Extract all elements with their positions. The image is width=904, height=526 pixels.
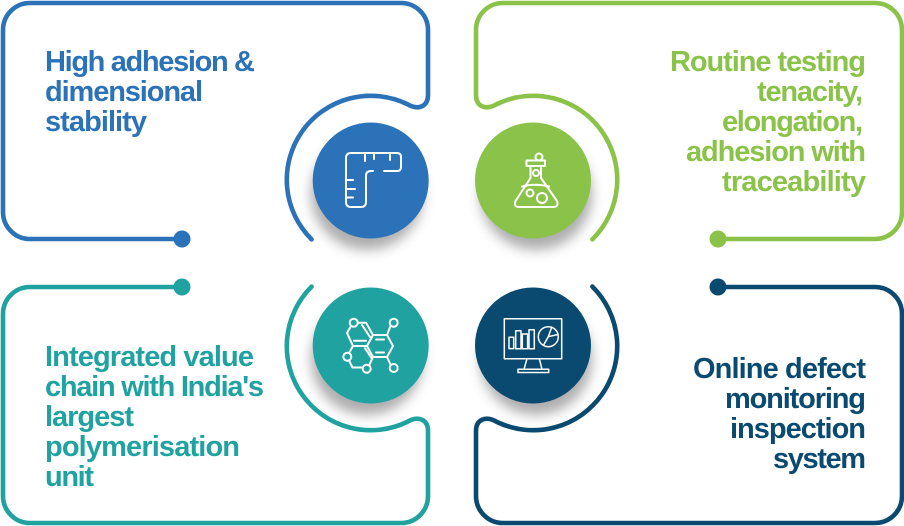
heading: system <box>773 443 866 475</box>
icon circle <box>313 122 429 238</box>
heading: chain with India's <box>45 371 264 403</box>
icon circle <box>313 288 429 404</box>
icon: monitor with charts <box>504 319 562 372</box>
outline: navy frame with arc <box>476 287 902 523</box>
heading: tenacity, <box>757 76 863 108</box>
connector dot <box>710 230 726 248</box>
connector dot <box>174 230 190 248</box>
icon circle <box>475 122 591 238</box>
heading: largest <box>45 401 134 433</box>
icon: ruler <box>346 153 401 207</box>
connector dot <box>710 278 726 296</box>
outline: green frame with arc <box>476 3 902 239</box>
connector dot <box>174 278 190 296</box>
panel: online defect monitoring (navy, bottom right) <box>475 278 902 523</box>
heading: stability <box>45 106 147 138</box>
icon circle shadow <box>311 303 423 415</box>
heading: inspection <box>730 413 866 445</box>
heading: traceability <box>722 166 866 198</box>
icon: molecule <box>343 319 398 373</box>
panel: high adhesion (blue, top left) <box>3 3 429 250</box>
heading: Online defect <box>693 353 866 385</box>
icon circle shadow <box>311 138 423 250</box>
heading: adhesion with <box>686 136 866 168</box>
icon circle shadow <box>480 303 592 415</box>
heading: Integrated value <box>45 341 254 373</box>
heading: dimensional <box>45 76 203 108</box>
icon circle <box>475 288 591 404</box>
panel: integrated value chain (teal, bottom left) <box>3 278 429 523</box>
heading: monitoring <box>725 383 866 415</box>
icon circle shadow <box>480 138 592 250</box>
outline: blue frame with arc <box>3 3 428 239</box>
heading: polymerisation <box>45 431 240 463</box>
heading: High adhesion & <box>45 46 255 78</box>
heading: unit <box>45 461 94 493</box>
icon: flask <box>515 154 558 207</box>
heading: Routine testing <box>670 46 866 78</box>
panel: routine testing (green, top right) <box>475 3 902 250</box>
heading: elongation, <box>722 106 863 138</box>
outline: teal frame with arc <box>3 287 428 523</box>
